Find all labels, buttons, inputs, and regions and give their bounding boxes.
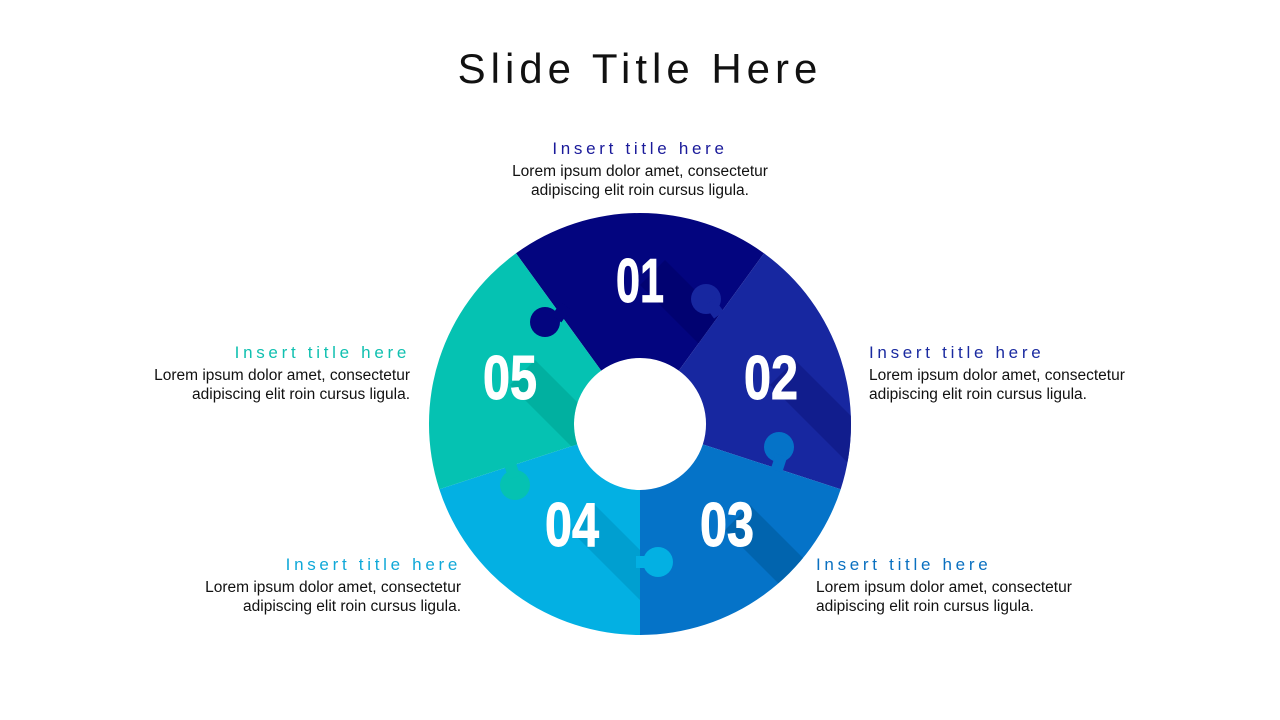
segment 05: [429, 253, 602, 490]
text block 04: [205, 555, 461, 615]
segment 02: [678, 253, 851, 490]
text block 01: Lorem ipsum dolor amet, consectetur: [512, 163, 768, 180]
numbers: 05: [483, 344, 537, 413]
numbers: 02: [744, 344, 798, 413]
text block 01: Insert title here: [552, 139, 728, 158]
numbers: [483, 247, 798, 560]
text block 04: Lorem ipsum dolor amet, consectetur: [205, 579, 461, 596]
text block 01: [512, 139, 768, 199]
text block 03: adipiscing elit roin cursus ligula.: [816, 598, 1034, 615]
segment 03: [640, 444, 841, 635]
numbers: 01: [616, 247, 664, 316]
segment 01: [516, 213, 764, 371]
text block 04: adipiscing elit roin cursus ligula.: [243, 598, 461, 615]
text block 02: Lorem ipsum dolor amet, consectetur: [869, 367, 1125, 384]
numbers: 03: [700, 491, 754, 560]
text block 01: adipiscing elit roin cursus ligula.: [531, 182, 749, 199]
text block 03: Insert title here: [816, 555, 991, 574]
text block 05: adipiscing elit roin cursus ligula.: [192, 386, 410, 403]
puzzle ring chart: [429, 213, 851, 635]
title: Slide Title Here: [458, 45, 822, 92]
text block 02: Insert title here: [869, 343, 1044, 362]
text block 02: [869, 343, 1125, 403]
text block 05: Insert title here: [235, 343, 410, 362]
text block 02: adipiscing elit roin cursus ligula.: [869, 386, 1087, 403]
text block 03: [816, 555, 1072, 615]
puzzle knobs: [500, 284, 794, 577]
text block 03: Lorem ipsum dolor amet, consectetur: [816, 579, 1072, 596]
text block 05: [154, 343, 410, 403]
numbers: 04: [545, 491, 599, 560]
text block 05: Lorem ipsum dolor amet, consectetur: [154, 367, 410, 384]
text block 04: Insert title here: [286, 555, 461, 574]
segment 04: [439, 444, 640, 635]
